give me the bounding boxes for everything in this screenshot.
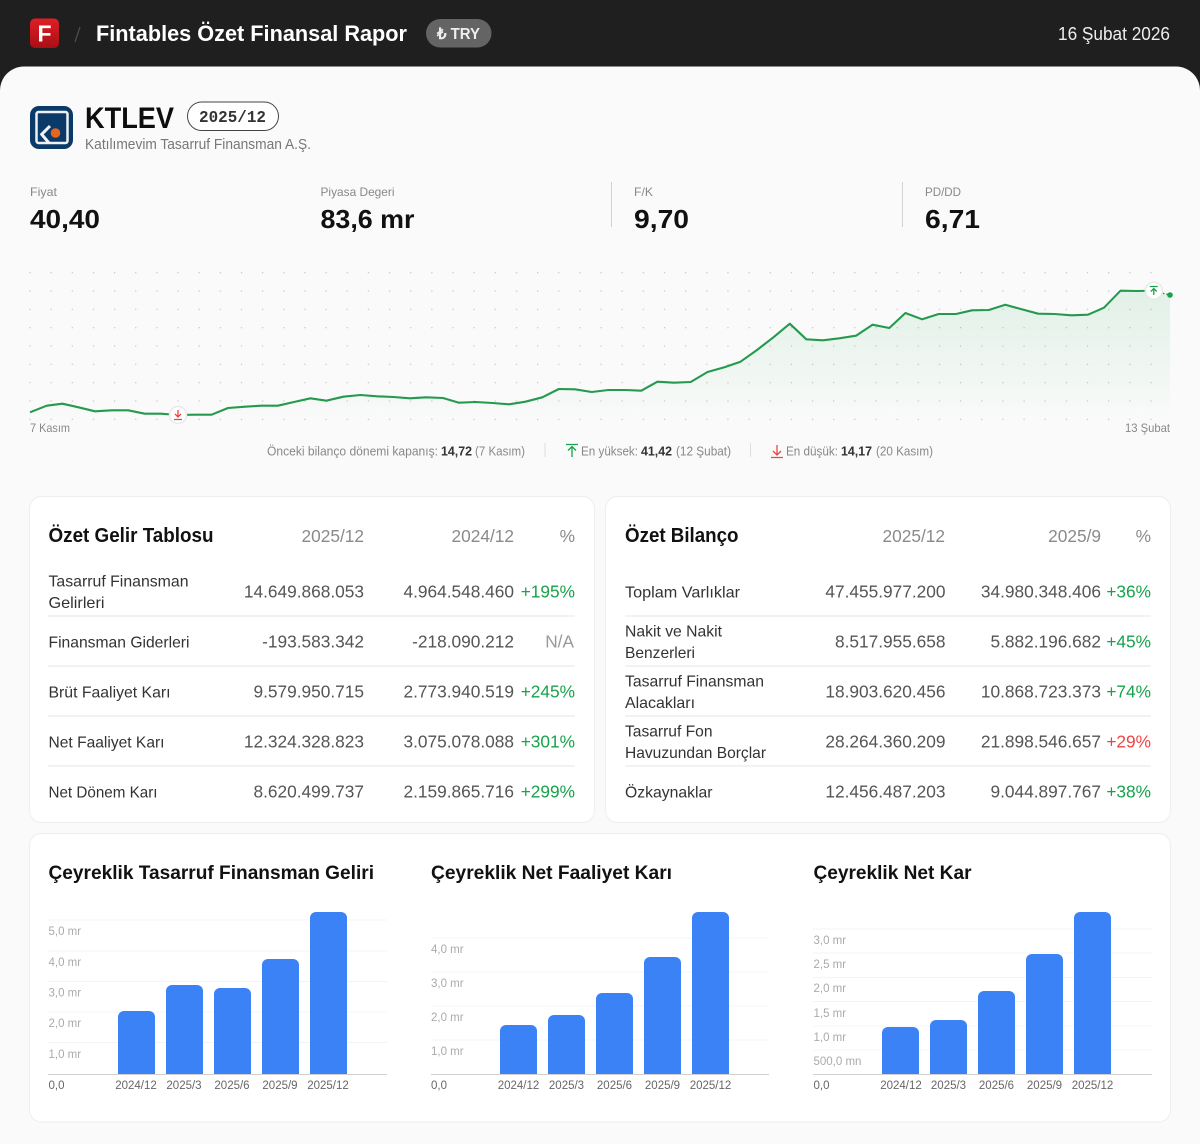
row: Finansman Giderleri: Finansman Giderleri [48,634,190,652]
row: Toplam Varlıklar: 47.455.977.200 [825,582,946,602]
metric: P/B [925,185,980,234]
row: Tasarruf Finansman Alacakları: +74% [1106,682,1151,702]
row: Tasarruf Finansman Alacakları [625,674,1151,712]
row: Brüt Faaliyet Karı: 2.773.940.519 [403,682,514,702]
row: Tasarruf Fon Havuzundan Borçlar: 28.264.360.209 [825,732,946,752]
top header bar [0,0,1200,90]
icon: KTLEV logo [30,106,73,149]
column headers [302,526,575,546]
icon: Fintables logo [30,18,59,48]
metric: market cap: 83,6 mr [320,204,414,234]
y-axis labels: 4,0 mr [431,944,464,956]
previous period close: Önceki bilanço dönemi kapanış: [267,444,438,458]
company name: Katılımevim Tasarruf Finansman A.Ş. [85,137,311,153]
metric: price [30,185,100,234]
metric: P/E: 9,70 [634,204,689,234]
row: Finansman Giderleri [48,632,574,652]
price line chart [29,271,1173,435]
row: Tasarruf Fon Havuzundan Borçlar: Tasarruf Fon [625,724,712,740]
panel: income statement [30,496,594,822]
row: Toplam Varlıklar [625,582,1151,602]
x-axis labels: 2025/6 [597,1080,632,1092]
y-axis labels [48,926,81,1092]
period high [566,444,731,458]
y-axis labels: 3,0 mr [431,978,464,990]
row: Toplam Varlıklar: +36% [1106,582,1151,602]
row: Finansman Giderleri: -218.090.212 [412,632,514,652]
row: Nakit ve Nakit Benzerleri: +45% [1106,632,1151,652]
chart title: Çeyreklik Net Kar [814,862,972,884]
period low: (20 Kasım) [876,444,933,458]
chart: quarterly net profit [813,862,1152,1092]
row: Tasarruf Finansman Gelirleri: Tasarruf Finansman [48,574,188,590]
row: Özkaynaklar: 12.456.487.203 [825,782,946,802]
period badge: 2025/12 [199,109,266,128]
icon: Fintables logo: F [38,20,52,46]
x-axis labels: 2025/9 [262,1080,298,1092]
x-axis labels: 2024/12 [498,1080,539,1092]
metric: market cap [320,185,414,234]
period low: En düşük: [786,444,838,458]
y-axis labels: 0,0 [814,1080,830,1092]
row: Net Dönem Karı: 8.620.499.737 [253,782,364,802]
row: Brüt Faaliyet Karı [48,682,575,702]
column headers: % [1136,526,1151,546]
x-axis labels: 2025/3 [931,1080,966,1092]
period low [771,444,933,458]
row: Tasarruf Finansman Gelirleri: 14.649.868.053 [244,582,364,602]
metric: P/B: 6,71 [925,204,980,234]
x-axis labels: 2025/6 [214,1080,250,1092]
column headers [883,526,1151,546]
end point dot [1167,292,1173,298]
y-axis labels: 3,0 mr [814,935,846,947]
y-axis labels: 2,0 mr [48,1018,81,1030]
high marker [1145,282,1162,299]
row: Net Faaliyet Karı: Net Faaliyet Karı [48,734,164,752]
row: Net Faaliyet Karı [48,732,575,752]
x-axis labels: 2025/3 [166,1080,202,1092]
low marker [170,406,186,424]
metric: P/B: PD/DD [925,185,961,199]
row: Tasarruf Finansman Alacakları: 18.903.620.456 [825,682,946,702]
chart area fill [30,291,1170,421]
previous period close: 14,72 [441,444,472,458]
row: Toplam Varlıklar: Toplam Varlıklar [625,584,741,602]
previous period close: (7 Kasım) [475,444,525,458]
metric: market cap: Piyasa Degeri [320,185,394,199]
row: Finansman Giderleri: -193.583.342 [262,632,364,652]
y-axis labels: 0,0 [431,1080,447,1092]
panel: quarterly charts [30,834,1170,1122]
x-axis labels [498,1080,731,1092]
bars [882,912,1111,1074]
x-axis labels: 2025/9 [1027,1080,1062,1092]
x-axis labels: 2025/6 [979,1080,1014,1092]
row: Tasarruf Finansman Alacakları: Alacakları [625,695,695,712]
breadcrumb slash [75,27,80,42]
row: Tasarruf Finansman Gelirleri: Gelirleri [48,595,104,612]
y-axis labels: 1,0 mr [48,1049,81,1061]
column headers: 2024/12 [452,526,514,546]
row: Nakit ve Nakit Benzerleri: 5.882.196.682 [990,632,1101,652]
x-axis labels [115,1080,349,1092]
row: Tasarruf Finansman Gelirleri: +195% [521,582,575,602]
y-axis labels: 2,0 mr [431,1012,464,1024]
chart title: Çeyreklik Net Faaliyet Karı [431,862,672,884]
row: Özkaynaklar: +38% [1106,782,1151,802]
column headers: 2025/12 [302,526,364,546]
row: Özkaynaklar: 9.044.897.767 [990,782,1101,802]
y-axis labels [814,935,861,1092]
panel heading: Özet Bilanço [625,524,738,547]
chart stats row [267,443,933,458]
metric: P/E [634,185,689,234]
bars [500,912,729,1074]
y-axis labels: 5,0 mr [48,926,81,938]
y-axis labels: 3,0 mr [48,988,81,1000]
x-axis labels: 2025/9 [645,1080,680,1092]
y-axis labels: 2,0 mr [814,983,846,995]
row: Net Faaliyet Karı: 12.324.328.823 [244,732,364,752]
metric: price: Fiyat [30,185,58,199]
y-axis labels: 1,5 mr [814,1008,846,1020]
chart title: Çeyreklik Tasarruf Finansman Geliri [48,862,374,884]
report title: Fintables Özet Finansal Rapor [96,21,407,46]
x-axis labels: 2024/12 [115,1080,157,1092]
row: Nakit ve Nakit Benzerleri: 8.517.955.658 [835,632,946,652]
row: Net Faaliyet Karı: +301% [521,732,575,752]
y-axis labels: 500,0 mn [814,1056,861,1068]
row: Özkaynaklar [625,782,1151,802]
period high: (12 Şubat) [676,444,731,458]
row: Brüt Faaliyet Karı: 9.579.950.715 [253,682,364,702]
period high: En yüksek: [581,444,638,458]
row: Brüt Faaliyet Karı: +245% [521,682,575,702]
row: Nakit ve Nakit Benzerleri [625,624,1151,662]
y-axis labels: 4,0 mr [48,957,81,969]
x-axis start label: 7 Kasım [30,421,70,435]
row: Nakit ve Nakit Benzerleri: Nakit ve Nakit [625,624,723,640]
currency badge: ₺ TRY [436,26,481,43]
row: Finansman Giderleri: N/A [545,632,574,652]
panel heading: Özet Gelir Tablosu [48,524,214,547]
row: Özkaynaklar: Özkaynaklar [625,784,713,802]
chart: quarterly net operating profit [431,862,769,1092]
row: Brüt Faaliyet Karı: Brüt Faaliyet Karı [48,684,170,702]
column headers: 2025/12 [883,526,945,546]
row: Nakit ve Nakit Benzerleri: Benzerleri [625,645,695,662]
row: Tasarruf Finansman Gelirleri: 4.964.548.460 [403,582,514,602]
chart: quarterly financing income [48,862,387,1092]
row: Tasarruf Finansman Alacakları: Tasarruf Finansman [625,674,764,690]
ticker: KTLEV [85,102,174,135]
x-axis labels [880,1080,1113,1092]
y-axis labels [431,944,464,1092]
y-axis labels: 0,0 [48,1080,64,1092]
column headers: 2025/9 [1048,526,1101,546]
period badge [188,102,278,130]
x-axis labels: 2025/12 [690,1080,731,1092]
row: Tasarruf Finansman Gelirleri [48,574,575,612]
row: Net Dönem Karı: 2.159.865.716 [403,782,514,802]
period high: 41,42 [641,444,672,458]
panel: balance sheet [606,496,1170,822]
row: Tasarruf Fon Havuzundan Borçlar [625,724,1151,762]
row: Net Dönem Karı: +299% [521,782,575,802]
row: Net Faaliyet Karı: 3.075.078.088 [403,732,514,752]
x-axis end label: 13 Şubat [1125,421,1171,435]
row: Toplam Varlıklar: 34.980.348.406 [981,582,1101,602]
row: Tasarruf Fon Havuzundan Borçlar: +29% [1106,732,1151,752]
x-axis labels: 2025/12 [307,1080,349,1092]
period low: 14,17 [841,444,872,458]
row: Tasarruf Fon Havuzundan Borçlar: Havuzundan Borçlar [625,745,767,762]
company header [30,102,311,153]
metric: P/E: F/K [634,185,653,199]
row: Net Dönem Karı [48,782,575,802]
x-axis labels: 2024/12 [880,1080,922,1092]
chart price line [30,291,1154,415]
bars [118,912,347,1074]
report date: 16 Şubat 2026 [1058,24,1170,44]
y-axis labels: 2,5 mr [814,959,846,971]
y-axis labels: 1,0 mr [431,1046,464,1058]
metric: price: 40,40 [30,204,100,234]
row: Tasarruf Fon Havuzundan Borçlar: 21.898.546.657 [981,732,1101,752]
x-axis labels: 2025/12 [1072,1080,1113,1092]
row: Net Dönem Karı: Net Dönem Karı [48,784,158,802]
x-axis labels: 2025/3 [549,1080,584,1092]
column headers: % [560,526,575,546]
y-axis labels: 1,0 mr [814,1032,846,1044]
row: Tasarruf Finansman Alacakları: 10.868.723.373 [981,682,1101,702]
currency badge [426,19,492,48]
